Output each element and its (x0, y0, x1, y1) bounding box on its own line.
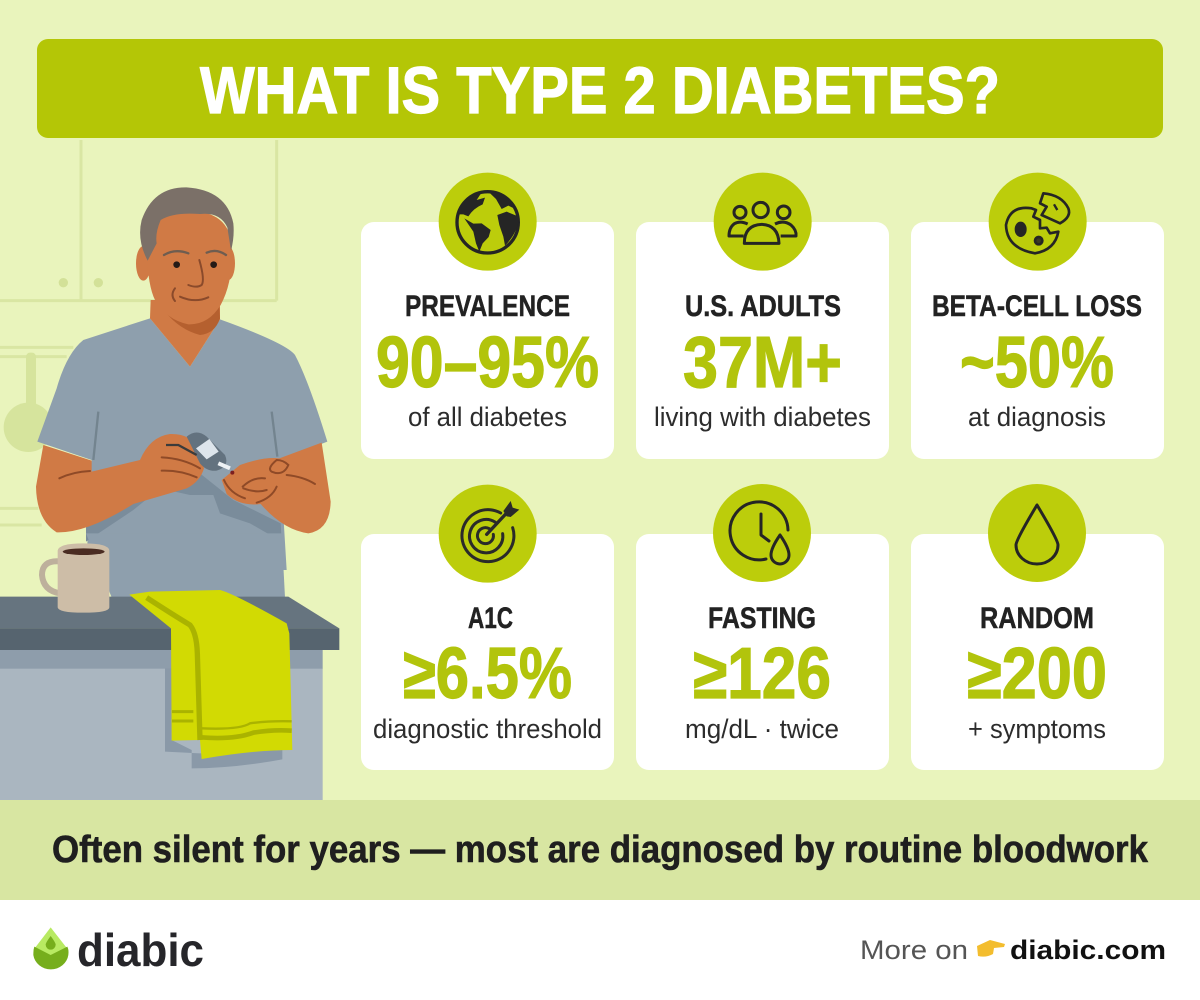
face (147, 211, 232, 324)
icon: clock with drop (713, 484, 811, 582)
left forearm and hand (36, 434, 204, 532)
card: fasting: FASTING (708, 602, 816, 635)
kitchen counter with mug and towel (0, 533, 339, 800)
counter top (0, 597, 339, 628)
lower shirt (86, 533, 285, 597)
skin lines (59, 457, 315, 503)
icon: pointing hand (977, 940, 1005, 957)
link: more on diabic.com (860, 935, 1166, 965)
card: random: ≥200 (967, 634, 1107, 714)
neck shadow (165, 307, 220, 335)
card: U.S. adults: living with diabetes (654, 402, 871, 432)
takeaway band (0, 800, 1200, 900)
shirt shadow and creases (93, 412, 277, 460)
icon: target (439, 485, 537, 583)
title banner: WHAT IS TYPE 2 DIABETES? (200, 53, 1000, 127)
shirt (37, 318, 327, 570)
card: A1C (361, 485, 614, 770)
card: prevalence: 90–95% (376, 323, 599, 403)
illustration: man checking blood glucose (36, 187, 331, 570)
card: beta-cell loss: ~50% (960, 323, 1114, 403)
card: beta-cell loss (911, 173, 1164, 459)
neck (150, 300, 220, 367)
card: beta-cell loss: at diagnosis (968, 402, 1106, 432)
card: random (911, 484, 1164, 770)
right forearm and hand (222, 443, 331, 533)
card: fasting (636, 484, 889, 770)
icon: damaged cell (989, 173, 1087, 271)
icon: globe (439, 173, 537, 271)
card: U.S. adults (636, 173, 889, 459)
towel shadow (165, 668, 282, 768)
icon: people group (714, 173, 812, 271)
card: random: + symptoms (968, 714, 1106, 744)
link: more on diabic.com: diabic.com (1010, 935, 1166, 965)
link: more on diabic.com: More on (860, 935, 968, 965)
card: U.S. adults: 37M+ (683, 323, 842, 403)
mug (42, 543, 109, 613)
towel (129, 590, 292, 759)
footer (0, 900, 1200, 1000)
card: A1C: diagnostic threshold (373, 714, 602, 744)
card: A1C: A1C (468, 602, 513, 635)
title banner (37, 39, 1163, 138)
logo: diabic: diabic (77, 924, 204, 976)
icon: blood drop (988, 484, 1086, 582)
card: beta-cell loss: BETA-CELL LOSS (932, 290, 1142, 323)
card: prevalence (361, 173, 614, 459)
card: prevalence: of all diabetes (408, 402, 567, 432)
hair (140, 187, 234, 261)
ears (136, 246, 151, 281)
kitchen background (0, 140, 277, 525)
card: U.S. adults: U.S. ADULTS (685, 290, 841, 323)
card: prevalence: PREVALENCE (405, 290, 570, 323)
card: fasting: mg/dL · twice (685, 714, 839, 744)
card: A1C: ≥6.5% (403, 634, 572, 714)
facial features (164, 251, 226, 301)
card: random: RANDOM (980, 602, 1094, 635)
glucose meter (187, 432, 226, 471)
card: fasting: ≥126 (693, 634, 831, 714)
counter cabinet (0, 668, 323, 800)
